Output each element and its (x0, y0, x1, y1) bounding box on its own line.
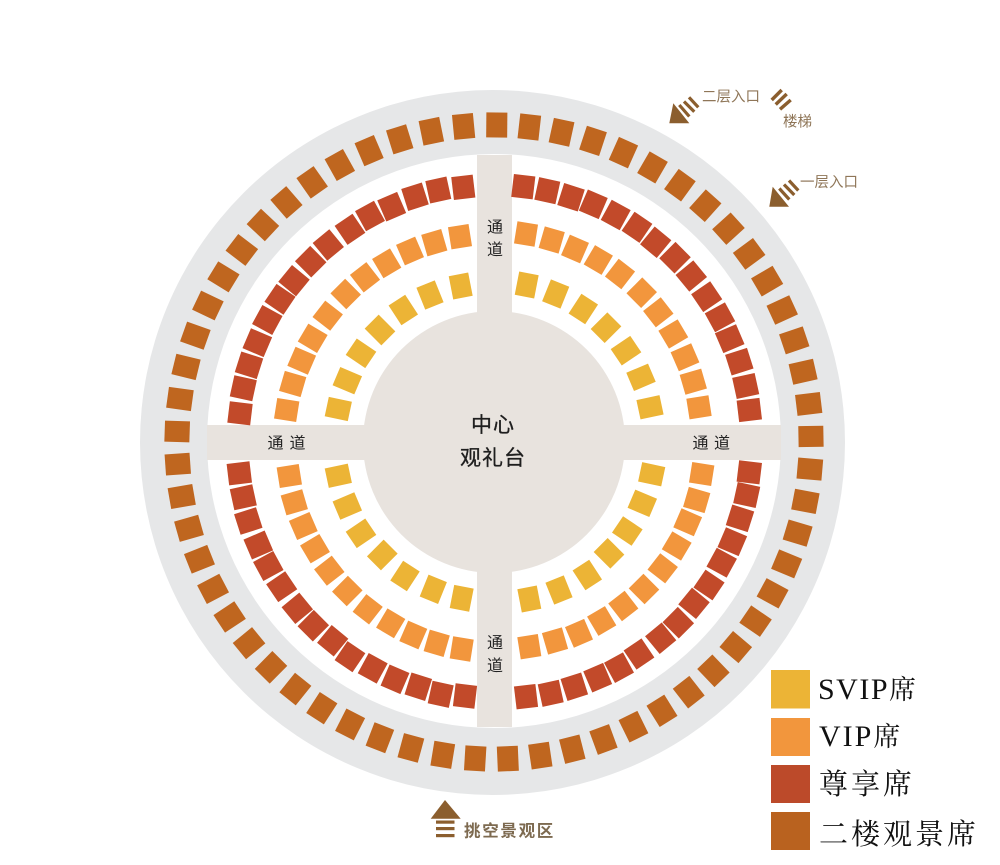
aisle label left: 通 (267, 434, 284, 452)
legend item: second-floor view (771, 812, 979, 851)
centre viewing platform (363, 311, 625, 573)
aisle label right: 通 (692, 434, 709, 452)
icon: atrium viewing arrow (431, 800, 461, 837)
icon: second-floor entrance arrow (669, 97, 698, 123)
label: stairs: 楼梯 (783, 114, 812, 130)
aisle label top: 道 (487, 241, 503, 259)
legend item: VIP: VIP席 (819, 720, 900, 753)
legend item: VIP (771, 718, 900, 756)
seats: VIP orange ring (274, 221, 714, 662)
aisle label bottom (487, 634, 503, 675)
centre platform label line 2: 观礼台 (460, 447, 526, 470)
label: first-floor entrance: 一层入口 (800, 175, 858, 191)
seats: SVIP yellow ring (325, 272, 665, 612)
legend item: SVIP: SVIP席 (818, 673, 916, 706)
legend item: SVIP (771, 670, 916, 708)
aisle label right (692, 434, 730, 452)
legend (771, 670, 979, 851)
seats: second-floor view ring (164, 112, 824, 772)
horizontal aisle (207, 425, 781, 460)
icon: first-floor entrance arrow (769, 180, 798, 207)
seats: premium red ring (227, 174, 762, 709)
inner white floor (207, 154, 781, 728)
legend item: second-floor view: 二楼观景席 (819, 818, 979, 851)
vertical aisle (477, 155, 512, 727)
aisle label left (267, 434, 306, 452)
aisle label bottom: 道 (487, 657, 503, 675)
aisle label top (487, 218, 503, 259)
centre platform label: 中心 (471, 414, 515, 437)
label: second-floor entrance: 二层入口 (702, 90, 760, 106)
legend item: premium: 尊享席 (819, 768, 915, 801)
aisle label bottom: 通 (487, 634, 503, 652)
icon: stairs (772, 90, 791, 109)
aisle label top: 通 (487, 218, 503, 236)
outer grey ring (140, 90, 845, 795)
legend item: premium (771, 765, 915, 803)
aisle label left: 道 (289, 434, 306, 452)
label: atrium view area: 挑空景观区 (464, 820, 555, 840)
aisle label right: 道 (714, 434, 730, 452)
